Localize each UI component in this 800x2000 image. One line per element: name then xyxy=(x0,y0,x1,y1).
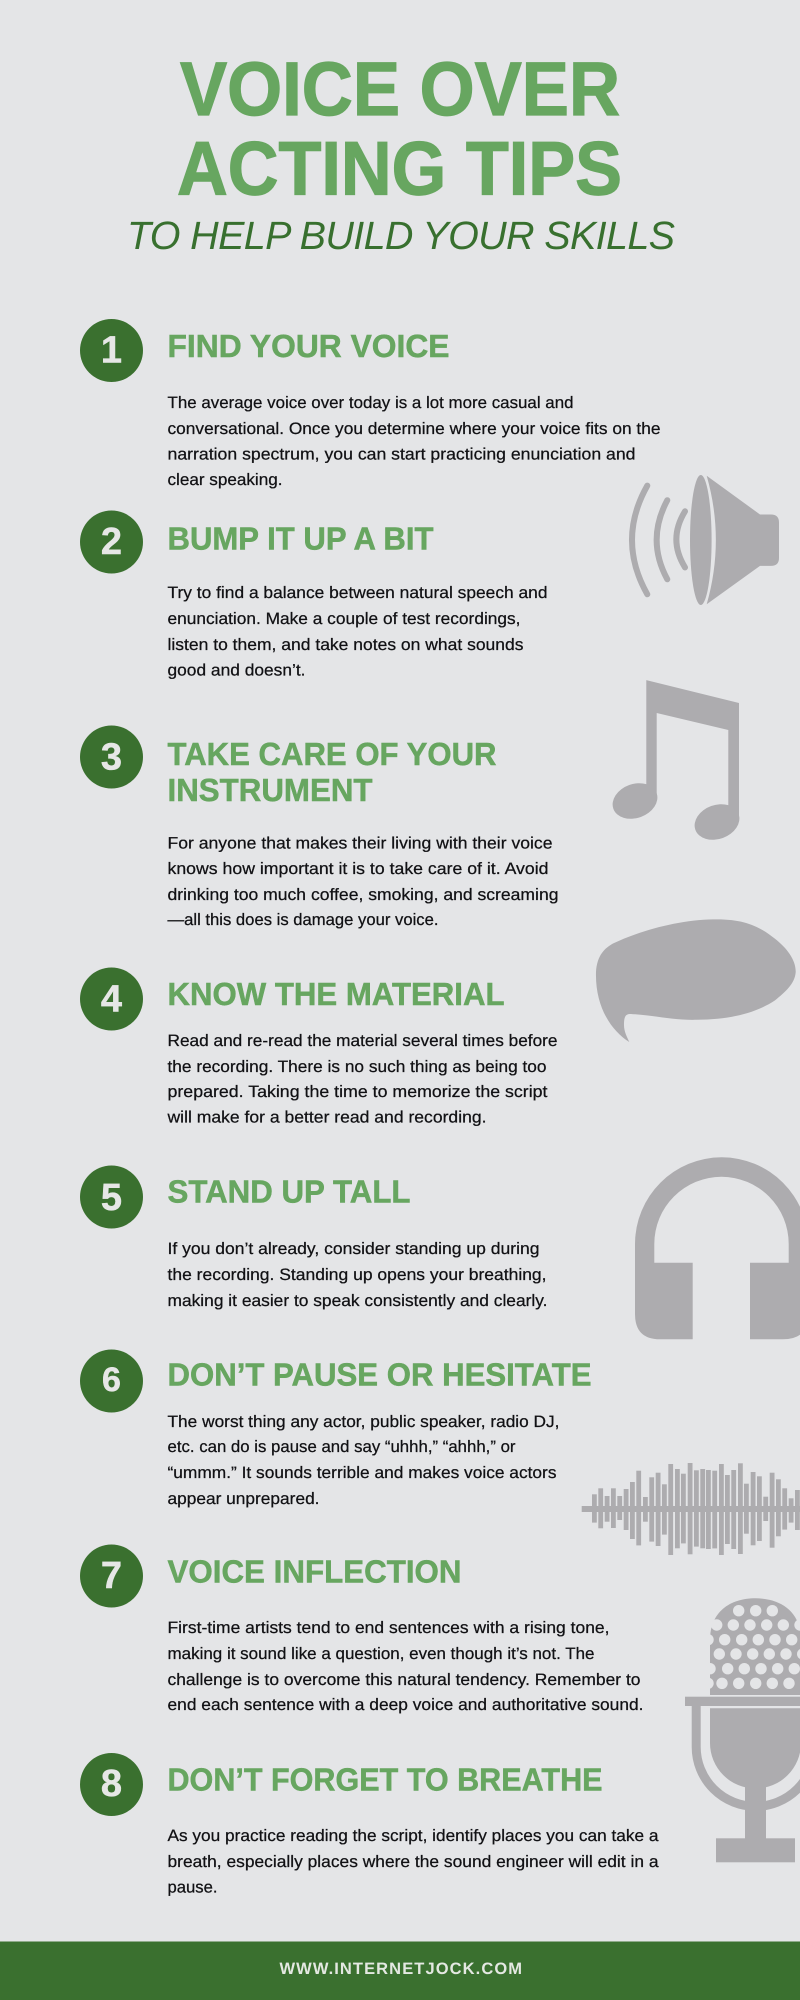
number badge 7 xyxy=(80,1544,143,1608)
number badge 7: 7 xyxy=(101,1555,122,1597)
body 1: narration spectrum, you can start practicing enunciation and xyxy=(168,446,636,464)
icon: headphones xyxy=(635,1157,800,1339)
footer url: WWW.INTERNETJOCK.COM xyxy=(280,1960,522,1978)
body 3: —all this does is damage your voice. xyxy=(168,911,438,929)
body 8: breath, especially places where the sound engineer will edit in a xyxy=(168,1853,659,1871)
body 7: challenge is to overcome this natural tendency. Remember to xyxy=(168,1671,640,1689)
body 2: listen to them, and take notes on what sounds xyxy=(168,636,524,654)
subtitle: TO HELP BUILD YOUR SKILLS xyxy=(127,214,675,258)
body 8: As you practice reading the script, identify places you can take a xyxy=(168,1827,659,1845)
tip 7 xyxy=(80,1544,644,1714)
number badge 8 xyxy=(80,1753,143,1816)
icon: sound waveform xyxy=(582,1463,800,1555)
body 4 xyxy=(166,1032,558,1126)
body 7: end each sentence with a deep voice and authoritative sound. xyxy=(168,1696,644,1714)
number badge 5 xyxy=(80,1166,143,1228)
title: ACTING TIPS xyxy=(177,126,622,212)
body 4: will make for a better read and recording. xyxy=(166,1108,486,1126)
body 8 xyxy=(168,1827,659,1896)
number badge 5: 5 xyxy=(101,1177,122,1219)
body 3: drinking too much coffee, smoking, and screaming xyxy=(168,886,558,904)
body 2 xyxy=(168,584,548,680)
body 5: If you don’t already, consider standing up during xyxy=(168,1240,540,1258)
tip 1 xyxy=(80,319,660,489)
body 6: The worst thing any actor, public speaker, radio DJ, xyxy=(168,1413,560,1431)
body 5: making it easier to speak consistently and clearly. xyxy=(168,1292,548,1310)
body 1: clear speaking. xyxy=(168,471,282,489)
body 7: making it sound like a question, even though it’s not. The xyxy=(168,1645,594,1663)
body 1 xyxy=(168,394,660,489)
number badge 6 xyxy=(80,1350,143,1412)
heading 2: BUMP IT UP A BIT xyxy=(168,520,434,556)
body 6: appear unprepared. xyxy=(168,1490,320,1508)
heading 5: STAND UP TALL xyxy=(168,1174,410,1210)
heading 6: DON’T PAUSE OR HESITATE xyxy=(168,1356,592,1392)
number badge 2: 2 xyxy=(101,521,122,563)
body 4: prepared. Taking the time to memorize the script xyxy=(168,1083,548,1101)
body 1: The average voice over today is a lot more casual and xyxy=(168,394,574,412)
body 4: the recording. There is no such thing as being too xyxy=(168,1058,546,1076)
body 2: good and doesn’t. xyxy=(168,662,306,680)
number badge 1 xyxy=(80,319,143,382)
heading 8: DON’T FORGET TO BREATHE xyxy=(168,1762,602,1798)
body 5: the recording. Standing up opens your breathing, xyxy=(168,1266,546,1284)
number badge 3 xyxy=(80,726,143,788)
number badge 4 xyxy=(80,968,143,1030)
body 5 xyxy=(168,1240,548,1310)
number badge 8: 8 xyxy=(101,1763,122,1805)
body 3: For anyone that makes their living with their voice xyxy=(168,834,552,852)
heading 3: TAKE CARE OF YOUR xyxy=(168,736,496,772)
body 3: knows how important it is to take care of it. Avoid xyxy=(168,860,548,878)
number badge 3: 3 xyxy=(101,736,122,778)
body 7: First-time artists tend to end sentences with a rising tone, xyxy=(168,1619,610,1637)
heading 4: KNOW THE MATERIAL xyxy=(168,976,504,1012)
title: VOICE OVER xyxy=(180,47,620,132)
body 6: etc. can do is pause and say “uhhh,” “ahhh,” or xyxy=(168,1438,516,1456)
body 6 xyxy=(168,1413,560,1508)
body 1: conversational. Once you determine where your voice fits on the xyxy=(168,420,660,438)
heading 3 xyxy=(168,736,496,808)
number badge 2 xyxy=(80,510,143,574)
tip 8 xyxy=(80,1753,659,1896)
heading 1: FIND YOUR VOICE xyxy=(168,328,450,364)
tip 3 xyxy=(80,726,558,929)
body 2: enunciation. Make a couple of test recordings, xyxy=(168,610,520,628)
tip 2 xyxy=(80,510,548,680)
icon: speech bubble xyxy=(596,919,796,1042)
icon: speaker xyxy=(632,475,779,605)
footer bar xyxy=(0,1942,800,2000)
body 3 xyxy=(168,834,558,929)
body 8: pause. xyxy=(168,1878,218,1896)
title xyxy=(177,47,622,212)
body 7 xyxy=(168,1619,644,1714)
tip 6 xyxy=(80,1350,592,1508)
icon: music note xyxy=(608,680,744,846)
icon: microphone xyxy=(685,1598,800,1862)
number badge 1: 1 xyxy=(101,330,122,372)
number badge 6: 6 xyxy=(102,1361,121,1399)
heading 7: VOICE INFLECTION xyxy=(168,1554,462,1590)
heading 3: INSTRUMENT xyxy=(168,772,373,808)
tip 5 xyxy=(80,1166,548,1310)
body 2: Try to find a balance between natural speech and xyxy=(168,584,548,602)
tip 4 xyxy=(80,968,558,1126)
body 6: “ummm.” It sounds terrible and makes voice actors xyxy=(168,1464,556,1482)
number badge 4: 4 xyxy=(101,978,122,1020)
body 4: Read and re-read the material several times before xyxy=(168,1032,558,1050)
